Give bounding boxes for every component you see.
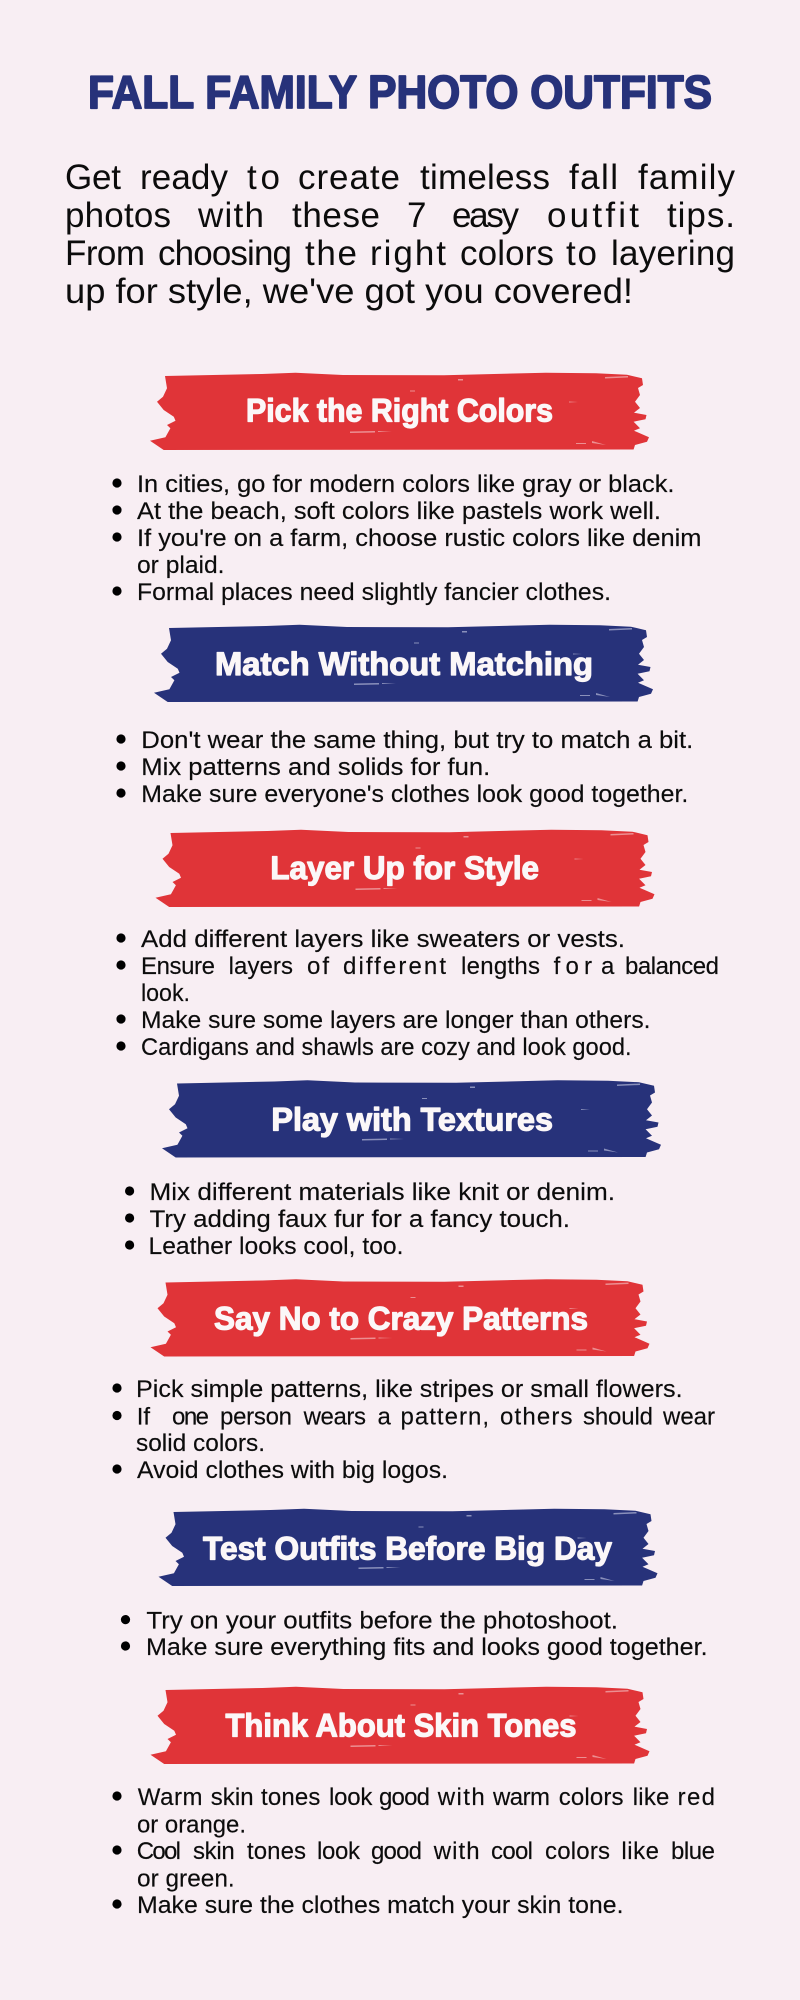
bullet item: Make sure everything fits and looks good together. bbox=[146, 1634, 708, 1661]
intro paragraph: colors bbox=[460, 234, 554, 273]
bullet list bbox=[112, 471, 701, 606]
bullet item: Try on your outfits before the photoshoot. bbox=[146, 1608, 618, 1635]
bullet item: pattern, bbox=[400, 1404, 489, 1430]
bullet item: good bbox=[379, 1784, 430, 1811]
brush heading: play with textures bbox=[162, 1080, 661, 1158]
panel: layer up for style bbox=[116, 830, 719, 1061]
bullet item: colors bbox=[559, 1784, 624, 1811]
bullet item: Try adding faux fur for a fancy touch. bbox=[150, 1206, 570, 1233]
bullet item: tones bbox=[247, 1838, 306, 1865]
bullet item bbox=[116, 953, 719, 1007]
bullet item: Mix different materials like knit or denim. bbox=[150, 1179, 615, 1206]
bullet item: or plaid. bbox=[137, 552, 224, 579]
bullet item: balanced bbox=[625, 953, 719, 980]
intro paragraph: tips. bbox=[667, 196, 735, 235]
bullet item: blue bbox=[671, 1838, 715, 1865]
brush heading: pick the right colors bbox=[150, 373, 649, 450]
bullet item: Leather looks cool, too. bbox=[148, 1233, 404, 1260]
bullet item: At the beach, soft colors like pastels work well. bbox=[137, 498, 661, 525]
brush heading: say no to crazy patterns bbox=[150, 1279, 650, 1356]
heading text: Test Outfits Before Big Day bbox=[203, 1531, 612, 1567]
panel: play with textures bbox=[125, 1080, 661, 1260]
bullet item: like bbox=[633, 1784, 669, 1811]
bullet item: person bbox=[220, 1404, 292, 1430]
intro paragraph: fall bbox=[569, 158, 618, 197]
bullet item: wear bbox=[662, 1404, 715, 1430]
bullet item: with bbox=[437, 1784, 485, 1811]
heading text: Match Without Matching bbox=[215, 646, 593, 682]
brush heading: test outfits before big day bbox=[158, 1509, 658, 1586]
heading text: Pick the Right Colors bbox=[246, 393, 553, 429]
intro paragraph: timeless bbox=[420, 158, 550, 197]
bullet list bbox=[116, 926, 719, 1061]
bullet list bbox=[125, 1179, 615, 1260]
intro paragraph: easy bbox=[452, 196, 520, 235]
intro paragraph: Get bbox=[65, 158, 121, 197]
intro paragraph: create bbox=[298, 158, 400, 197]
panel: match without matching bbox=[116, 625, 693, 808]
bullet item: or orange. bbox=[137, 1812, 246, 1839]
panel: say no to crazy patterns bbox=[112, 1279, 715, 1484]
bullet item: look bbox=[329, 1784, 373, 1811]
bullet item: solid colors. bbox=[136, 1430, 265, 1457]
bullet item: for bbox=[554, 953, 592, 980]
brush heading: match without matching bbox=[154, 625, 653, 702]
bullet item: look bbox=[317, 1838, 361, 1865]
bullet list bbox=[121, 1608, 708, 1661]
bullet item: layers bbox=[229, 953, 293, 980]
bullet item: Add different layers like sweaters or vests. bbox=[141, 926, 625, 953]
bullet item: Ensure bbox=[141, 953, 215, 980]
heading text: Say No to Crazy Patterns bbox=[214, 1301, 588, 1337]
bullet item: Avoid clothes with big logos. bbox=[137, 1457, 448, 1484]
bullet item: In cities, go for modern colors like gray or black. bbox=[137, 471, 674, 498]
title: FALL FAMILY PHOTO OUTFITS bbox=[88, 66, 712, 118]
bullet item: Make sure the clothes match your skin tone. bbox=[137, 1892, 624, 1919]
bullet item: Cool bbox=[137, 1838, 181, 1865]
intro paragraph: choosing bbox=[158, 234, 292, 273]
brush heading: think about skin tones bbox=[150, 1687, 650, 1764]
bullet item: or green. bbox=[137, 1866, 235, 1893]
bullet item: Pick simple patterns, like stripes or small flowers. bbox=[136, 1376, 683, 1403]
bullet item bbox=[112, 1784, 715, 1839]
bullet item: with bbox=[433, 1838, 480, 1865]
bullet item: should bbox=[583, 1404, 653, 1430]
bullet item: of bbox=[307, 953, 329, 980]
intro paragraph: with bbox=[197, 196, 264, 235]
bullet item: tones bbox=[261, 1784, 320, 1811]
bullet item: different bbox=[343, 953, 446, 980]
intro paragraph: ready bbox=[140, 158, 228, 197]
intro paragraph: up for style, we've got you covered! bbox=[65, 272, 633, 311]
intro paragraph: the bbox=[305, 234, 357, 273]
intro paragraph: outfit bbox=[547, 196, 639, 235]
intro paragraph: layering bbox=[611, 234, 735, 273]
bullet item bbox=[112, 525, 701, 579]
bullet item: a bbox=[601, 953, 615, 980]
intro paragraph: photos bbox=[65, 196, 171, 235]
bullet item: Make sure some layers are longer than others. bbox=[141, 1007, 650, 1034]
bullet item: wears bbox=[303, 1404, 366, 1430]
bullet item: Cardigans and shawls are cozy and look good. bbox=[141, 1034, 632, 1061]
intro paragraph: family bbox=[638, 158, 736, 197]
bullet item: Don't wear the same thing, but try to match a bit. bbox=[141, 727, 693, 754]
heading text: Play with Textures bbox=[271, 1102, 553, 1138]
bullet item bbox=[112, 1838, 715, 1893]
intro paragraph bbox=[65, 158, 736, 311]
intro paragraph: 7 bbox=[407, 196, 426, 235]
bullet item: like bbox=[621, 1838, 659, 1865]
bullet item: others bbox=[500, 1404, 572, 1430]
bullet list bbox=[112, 1784, 715, 1919]
bullet item: look. bbox=[141, 980, 190, 1007]
panel: think about skin tones bbox=[112, 1687, 715, 1919]
bullet item: Mix patterns and solids for fun. bbox=[141, 754, 490, 781]
bullet item: warm bbox=[492, 1784, 550, 1811]
bullet item: colors bbox=[545, 1838, 610, 1865]
brush heading: layer up for style bbox=[156, 830, 654, 907]
bullet item: one bbox=[172, 1404, 209, 1430]
bullet list bbox=[112, 1376, 715, 1484]
intro paragraph: to bbox=[566, 234, 597, 273]
intro paragraph: From bbox=[65, 234, 145, 273]
bullet item: a bbox=[378, 1404, 392, 1430]
panel: pick the right colors bbox=[112, 373, 701, 606]
heading text: Think About Skin Tones bbox=[226, 1708, 576, 1744]
bullet item: Warm bbox=[138, 1784, 202, 1811]
intro paragraph: to bbox=[247, 158, 280, 197]
bullet item: good bbox=[371, 1838, 422, 1865]
bullet item: lengths bbox=[461, 953, 540, 980]
bullet list bbox=[116, 727, 693, 808]
bullet item: red bbox=[678, 1784, 715, 1811]
intro paragraph: these bbox=[292, 196, 380, 235]
panel: test outfits before big day bbox=[121, 1509, 708, 1661]
bullet item: If bbox=[137, 1404, 150, 1430]
bullet item: Make sure everyone's clothes look good together. bbox=[141, 781, 688, 808]
bullet item: If you're on a farm, choose rustic colors like denim bbox=[137, 525, 702, 552]
heading text: Layer Up for Style bbox=[270, 850, 539, 886]
intro paragraph: right bbox=[370, 234, 446, 273]
bullet item: cool bbox=[491, 1838, 533, 1865]
bullet item: skin bbox=[193, 1838, 235, 1865]
bullet item bbox=[112, 1404, 715, 1457]
bullet item: Formal places need slightly fancier clothes. bbox=[137, 579, 611, 606]
bullet item: skin bbox=[211, 1784, 254, 1811]
